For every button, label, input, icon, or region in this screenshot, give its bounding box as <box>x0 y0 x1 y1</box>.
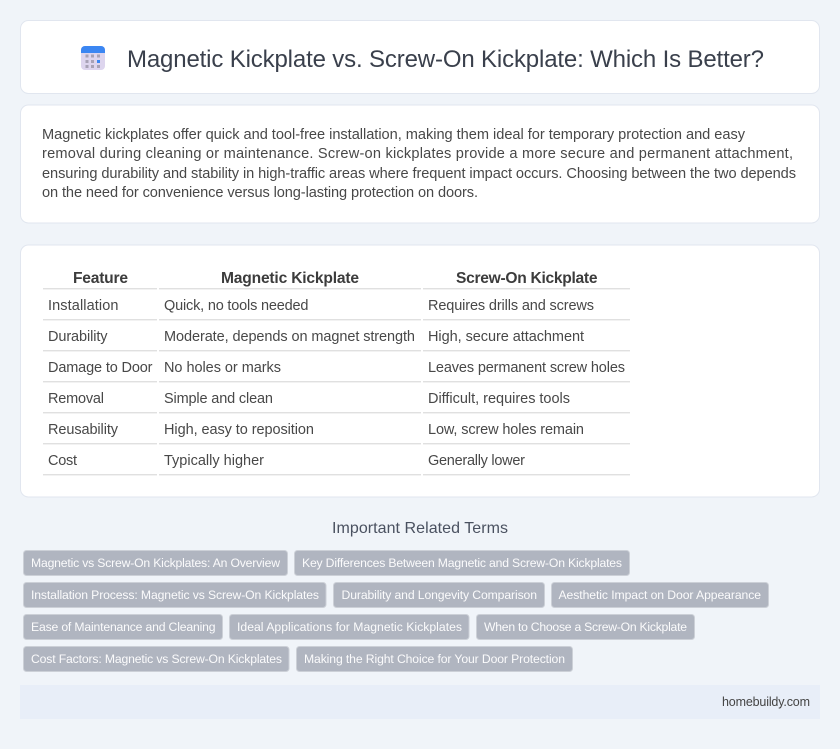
tag: Making the Right Choice for Your Door Protection <box>304 652 565 666</box>
tag: Magnetic vs Screw-On Kickplates: An Overview <box>31 556 280 570</box>
tag <box>24 582 326 608</box>
row: installation: Requires drills and screws <box>428 298 594 314</box>
tag: Ease of Maintenance and Cleaning <box>31 620 216 634</box>
row: damage to door: No holes or marks <box>164 360 281 376</box>
footer <box>20 685 820 719</box>
row: reusability: Low, screw holes remain <box>428 422 584 438</box>
row: installation <box>48 298 594 314</box>
row: installation: Quick, no tools needed <box>164 298 308 314</box>
table rules <box>43 288 630 475</box>
row: reusability: High, easy to reposition <box>164 422 314 438</box>
row: durability: High, secure attachment <box>428 329 584 345</box>
tag <box>24 646 289 672</box>
tag <box>552 582 768 608</box>
tag <box>294 550 630 576</box>
tag <box>296 646 572 672</box>
tag group: related terms <box>24 550 768 672</box>
row: cost: Typically higher <box>164 453 264 469</box>
text block: introduction: removal during cleaning or maintenance. Screw-on kickplates provide a more secure and permanent attachment, <box>42 146 793 162</box>
tag: Ideal Applications for Magnetic Kickplates <box>237 620 462 634</box>
panel: introduction <box>20 105 820 223</box>
row: removal: Simple and clean <box>164 391 273 407</box>
tag: Key Differences Between Magnetic and Screw-On Kickplates <box>302 556 622 570</box>
tag: Installation Process: Magnetic vs Screw-On Kickplates <box>31 588 319 602</box>
title: Magnetic Kickplate vs. Screw-On Kickplate: Which Is Better? <box>127 46 764 73</box>
tag <box>230 614 469 640</box>
row: damage to door: Leaves permanent screw holes <box>428 360 625 376</box>
text block: introduction: on the need for convenience versus long-lasting protection on doors. <box>42 185 478 201</box>
table header <box>73 270 598 287</box>
table header: Feature <box>73 270 128 287</box>
text block: introduction: ensuring durability and stability in high-traffic areas where frequent impact occurs. Choosing between the two depends <box>42 166 796 182</box>
row: reusability <box>48 422 584 438</box>
tag <box>24 614 222 640</box>
row: durability: Moderate, depends on magnet strength <box>164 329 415 345</box>
row: reusability: Reusability <box>48 422 119 438</box>
row: cost: Generally lower <box>428 453 525 469</box>
row: installation: Installation <box>48 298 118 314</box>
tag: When to Choose a Screw-On Kickplate <box>484 620 687 634</box>
tag <box>24 550 288 576</box>
row: damage to door <box>48 360 625 376</box>
text block: introduction: Magnetic kickplates offer quick and tool-free installation, making them ideal for temporary protection and easy <box>42 127 746 143</box>
row: cost: Cost <box>48 453 77 469</box>
tag <box>334 582 544 608</box>
row: damage to door: Damage to Door <box>48 360 153 376</box>
tag: Cost Factors: Magnetic vs Screw-On Kickplates <box>31 652 282 666</box>
tag: Aesthetic Impact on Door Appearance <box>558 588 761 602</box>
row: durability <box>48 329 584 345</box>
tag: Durability and Longevity Comparison <box>342 588 537 602</box>
panel: comparison table <box>20 245 820 497</box>
panel: header <box>20 20 820 94</box>
row: removal: Difficult, requires tools <box>428 391 570 407</box>
table header: Screw-On Kickplate <box>456 270 598 287</box>
row: removal <box>48 391 570 407</box>
row: cost <box>48 453 525 469</box>
footer source: homebuildy.com <box>722 695 810 709</box>
row: removal: Removal <box>48 391 104 407</box>
icon: calendar <box>81 46 105 70</box>
text block: introduction <box>42 127 796 201</box>
row: durability: Durability <box>48 329 108 345</box>
tag <box>476 614 694 640</box>
heading: related terms: Important Related Terms <box>332 520 508 537</box>
table header: Magnetic Kickplate <box>221 270 359 287</box>
